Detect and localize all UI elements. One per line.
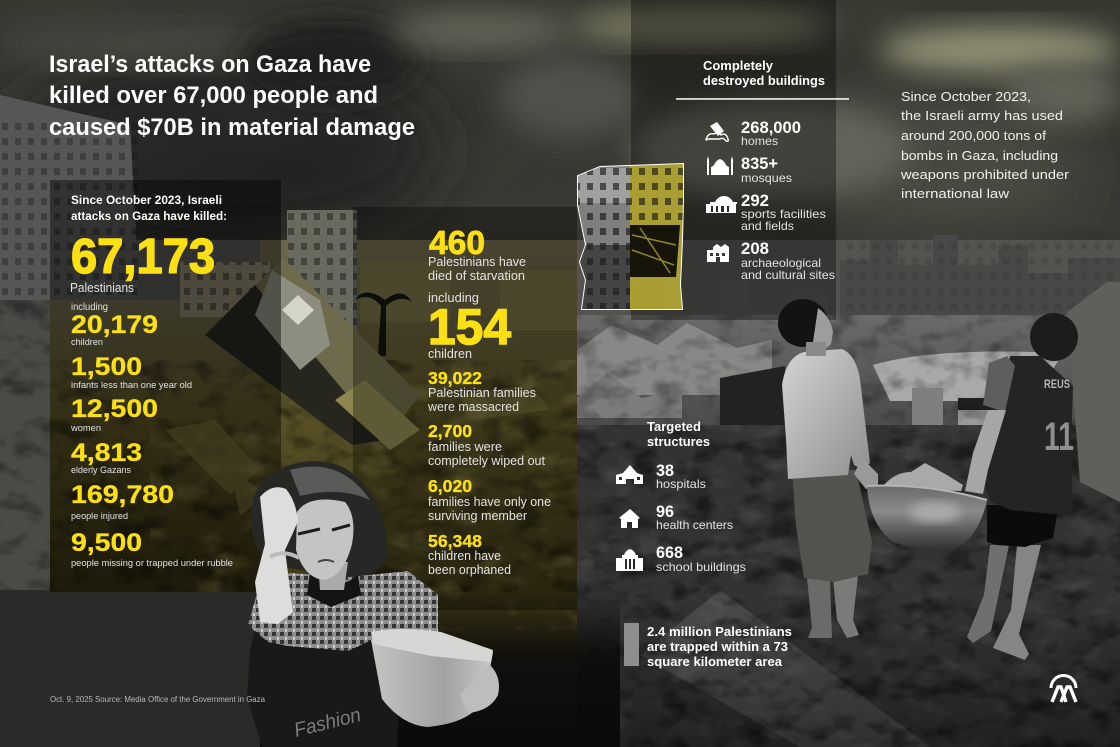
panel: destroyed buildings backdrop [631,0,836,320]
stat: school buildings: school buildings [656,560,746,574]
stat: total killed: Palestinians [70,281,134,295]
stat: school buildings: 668 [656,543,683,562]
stat: families massacred: were massacred [427,400,519,414]
stat: homes: homes [741,134,778,148]
text block: bomb tonnage: around 200,000 tons of [901,128,1046,143]
targeted structures heading [647,420,710,449]
stat: orphans: children have [428,549,501,563]
stat: homes [706,118,801,148]
casualties heading [71,195,227,223]
title: Israel’s attacks on Gaza have [49,51,371,78]
metal basin [867,485,987,551]
duotone yellow scene [50,300,577,592]
stat: families wiped out: 2,700 [428,421,472,441]
photo: two boys carrying a basin [778,299,1078,660]
stat: orphans: 56,348 [428,531,482,551]
stat: sports facilities [706,191,826,233]
stat: starvation deaths [428,224,526,283]
stat: children starved: children [428,347,472,361]
icon: collapsed home [706,122,728,141]
stat: children starved: 154 [428,299,511,355]
boy on right: 11 [1044,415,1074,459]
stat: sports facilities: sports facilities [741,207,826,221]
rubble ground right [577,425,1120,747]
text block: bomb tonnage: international law [901,186,1010,201]
stat: health centers: health centers [656,518,733,532]
stat: women: 12,500 [71,395,158,423]
stat: mosques: mosques [741,171,792,185]
neck and face [318,562,348,590]
cut-out of destroyed tower [578,164,684,310]
dress [247,590,405,747]
stat: homes: 268,000 [741,118,801,137]
stat: orphans [428,531,511,577]
stat: hospitals: 38 [656,461,674,480]
tilted billboard wreck [205,258,420,440]
stat: archaeological sites: archaeological [741,256,821,270]
stat: missing: people missing or trapped under rubble [71,558,233,569]
stat: injured: people injured [71,511,128,522]
boy on right [965,313,1078,660]
stat: women: women [70,423,101,434]
icon: mosque [707,156,733,175]
stat: starvation deaths: 460 [429,224,485,261]
text block: bomb tonnage: weapons prohibited under [900,167,1070,182]
text block: casualty figures [70,195,233,569]
source note: Oct. 9, 2025 Source: Media Office of the Government in Gaza [50,695,266,704]
stat: health centers: 96 [656,502,674,521]
stat: children: children [71,337,103,348]
stat: sports facilities: and fields [741,219,794,233]
targeted structures heading: structures [647,435,710,449]
stat: archaeological sites: and cultural sites [741,268,835,282]
stat: mosques: 835+ [741,154,778,173]
stat: elderly: elderly Gazans [71,465,131,476]
stat: sports facilities: 292 [741,191,769,210]
stat: health centers [619,502,733,532]
stat: injured [71,481,174,522]
title: caused $70B in material damage [49,114,415,141]
callout: 73 square kilometer area: 2.4 million Palestinians [647,625,792,639]
stat: families massacred: Palestinian families [428,386,536,400]
stat: children: 20,179 [71,311,158,339]
callout: 73 square kilometer area: square kilometer area [647,655,783,669]
stat: families wiped out [428,421,546,468]
panel: starvation backdrop [353,207,577,610]
bowl [371,639,493,727]
destroyed buildings heading [703,59,825,88]
raised arm and hand [255,487,298,624]
stat: sole survivors: 6,020 [428,476,472,496]
title: killed over 67,000 people and [49,82,378,109]
stat: total killed [70,230,215,313]
stat: infants: 1,500 [71,353,142,381]
logo: Anadolu Agency [1051,675,1076,702]
skyline bands [0,240,1120,350]
stat: school buildings [616,543,746,574]
stat: families massacred [427,368,536,414]
stat: hospitals: hospitals [656,477,706,491]
stat: mosques [707,154,792,185]
stat: families wiped out: completely wiped out [428,454,546,468]
stat: elderly: 4,813 [71,439,142,467]
stat: infants: infants less than one year old [71,380,192,391]
stat: total killed: including [71,302,108,313]
stat: total killed: 67,173 [71,230,215,284]
stat: sole survivors: surviving member [428,509,527,523]
stat: women [70,395,158,434]
icon: hospital [616,465,643,484]
stat: archaeological sites: 208 [741,239,769,258]
tents [577,315,1120,430]
rubble slabs [165,385,550,515]
casualties heading: attacks on Gaza have killed: [71,211,227,223]
destroyed buildings heading: Completely [703,59,773,73]
stat: starvation deaths: Palestinians have [428,255,526,269]
text block: starvation and family figures [427,224,551,577]
text block: completely destroyed buildings [676,59,849,282]
callout: 73 square kilometer area [624,623,792,669]
stat: injured: 169,780 [71,481,174,509]
callout: 73 square kilometer area: are trapped within a 73 [647,640,788,654]
targeted structures heading: Targeted [647,420,701,434]
icon: health center [619,509,640,528]
destroyed buildings heading: destroyed buildings [703,74,825,88]
stat: sole survivors: families have only one [428,495,551,509]
icon: cultural site [707,244,729,262]
stat: hospitals [616,461,706,491]
text block: targeted structures [616,420,746,574]
text block: bomb tonnage: the Israeli army has used [901,108,1063,123]
stat: missing [71,529,233,569]
stat: sole survivors [428,476,551,523]
text block: bomb tonnage: bombs in Gaza, including [901,148,1058,163]
boy on right: REUS [1044,377,1070,391]
Fashion print: Fashion [292,704,363,742]
icon: sports building [706,196,737,213]
hair [251,461,388,579]
stat: children [71,311,158,348]
ruined building left [0,95,140,300]
stat: missing: 9,500 [71,529,142,557]
title [49,51,415,141]
casualties heading: Since October 2023, Israeli [71,195,222,207]
stat: orphans: been orphaned [428,563,511,577]
boy on left [778,299,878,638]
text block: bomb tonnage: Since October 2023, [901,89,1031,104]
stat: starvation deaths: died of starvation [428,269,525,283]
stat: infants [71,353,192,391]
photo: girl holding a bowl [247,461,499,747]
stat: elderly [71,439,142,476]
stat: families wiped out: families were [428,440,502,454]
stat: families massacred: 39,022 [428,368,482,388]
icon: school [616,549,643,571]
panel: casualties backdrop [50,180,281,592]
stat: archaeological sites [707,239,835,282]
laundry in basin [883,463,963,491]
stat: children starved: including [428,291,479,305]
gray scale bar [624,623,639,666]
text block: bomb tonnage [900,89,1070,201]
